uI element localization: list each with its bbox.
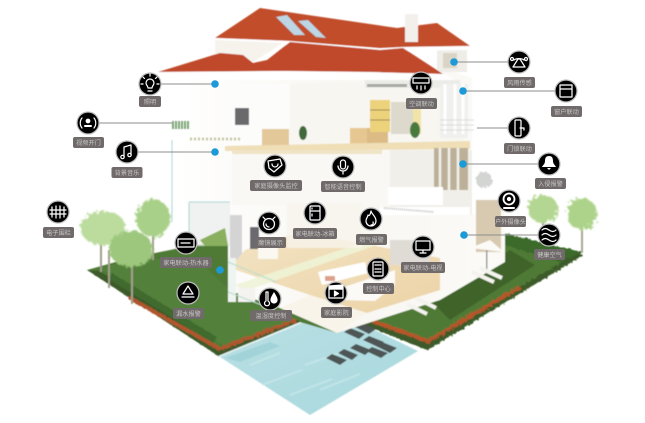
swimming pool (218, 322, 418, 415)
callout: water leak alarm: 漏水报警 (176, 310, 201, 318)
callout: gas alarm (356, 208, 387, 245)
callout: temperature and humidity: 温湿度控制 (256, 312, 286, 320)
patio (280, 295, 367, 333)
callout: voice control (321, 156, 365, 192)
callout: TV link: 家电联动-电视 (403, 264, 443, 272)
callout: window link: 窗户联动 (554, 108, 579, 116)
callout: air conditioner link (406, 72, 437, 109)
callout: water heater link: 家电联动-热水器 (163, 259, 209, 267)
callout: water leak alarm (173, 282, 204, 319)
callout: healthy air: 健康空气 (537, 251, 562, 259)
callout: electronic fence (43, 201, 74, 238)
balcony plants (172, 125, 240, 139)
callout: electronic fence: 电子围栏 (46, 229, 71, 237)
building body (172, 50, 505, 333)
stepping stones (326, 323, 397, 365)
callout: water heater link (160, 232, 212, 268)
callout: door lock link (504, 117, 535, 154)
trees (80, 195, 597, 304)
callout: temperature and humidity (250, 288, 292, 321)
upper floor (235, 84, 465, 144)
glass room left (189, 202, 230, 246)
callout: outdoor camera (495, 190, 526, 227)
callout: home cinema: 家庭影院 (324, 309, 349, 317)
callout: intrusion alarm: 入侵报警 (538, 180, 563, 188)
callout: home cinema (321, 282, 352, 318)
callout: lighting (139, 73, 161, 107)
callout: background music: 背景音乐 (115, 169, 139, 177)
callout: background music (112, 141, 142, 178)
callout: wind and rain sensor: 风雨传感 (507, 79, 532, 87)
house illustration (80, 8, 597, 415)
callout: magic mirror (255, 212, 286, 248)
callout: gas alarm: 燃气报警 (359, 236, 384, 244)
callout: video door: 视频开门 (76, 139, 101, 147)
right balcony (440, 84, 468, 138)
callout: window link (551, 80, 582, 117)
callout: wind and rain sensor (504, 51, 535, 88)
callout: home camera (250, 155, 302, 191)
callout: control centre (363, 258, 394, 294)
callout: outdoor camera: 户外摄像头 (495, 218, 526, 226)
connector lines and dots (99, 58, 555, 274)
callout: fridge link (293, 202, 337, 239)
ground floor (230, 232, 440, 313)
callout: door lock link: 门锁联动 (507, 145, 532, 153)
callout: fridge link: 家电联动-冰箱 (295, 230, 335, 238)
callout: voice control: 智能语音控制 (324, 183, 362, 191)
outdoor wall and parasol (476, 200, 501, 252)
callout: healthy air (534, 224, 565, 260)
middle floor (232, 150, 392, 205)
callout: home camera: 家庭摄像头监控 (254, 182, 298, 190)
callout: intrusion alarm (535, 153, 566, 189)
callout: air conditioner link: 空调联动 (409, 100, 434, 108)
callout: TV link (401, 236, 445, 273)
callout: video door (73, 112, 104, 148)
callout: control centre: 控制中心 (366, 285, 391, 293)
lawn (87, 233, 583, 357)
roof (158, 8, 470, 80)
callout: lighting: 照明 (144, 99, 156, 106)
callout: magic mirror: 魔镜展示 (258, 239, 283, 247)
